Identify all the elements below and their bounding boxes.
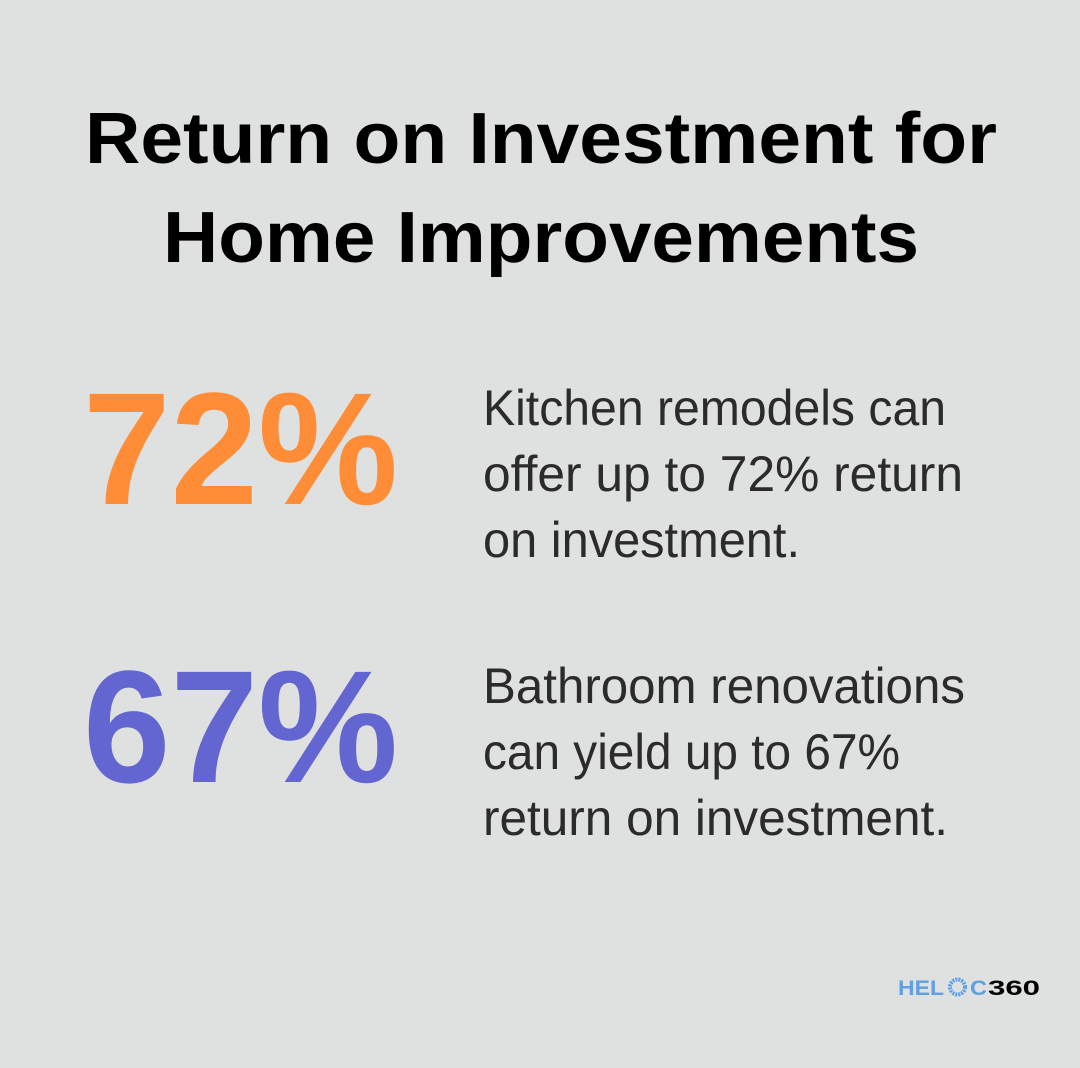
logo: HELOC360 [898, 977, 1040, 1000]
stat description: bathroom: can yield up to 67% [483, 724, 900, 780]
stat value: 72%: 72% [83, 359, 398, 538]
title: Home Improvements [163, 198, 919, 278]
title [85, 99, 997, 278]
stat: bathroom renovations [83, 637, 965, 846]
stat description: kitchen: Kitchen remodels can [483, 380, 946, 436]
logo: HELOC360: HEL [898, 977, 944, 1000]
stat: kitchen remodels [83, 359, 963, 568]
logo: HELOC360: 360 [988, 977, 1040, 1000]
stat description: bathroom: return on investment. [483, 790, 948, 846]
stat description: bathroom: Bathroom renovations [483, 658, 965, 714]
icon: logo swirl [950, 980, 965, 994]
stat description: kitchen [483, 380, 963, 568]
stat description: bathroom [483, 658, 965, 846]
stat value: 67%: 67% [83, 637, 398, 816]
stat description: kitchen: on investment. [483, 512, 800, 568]
stat description: kitchen: offer up to 72% return [483, 446, 963, 502]
title: Return on Investment for [85, 99, 997, 179]
logo: HELOC360: C [970, 977, 987, 1000]
